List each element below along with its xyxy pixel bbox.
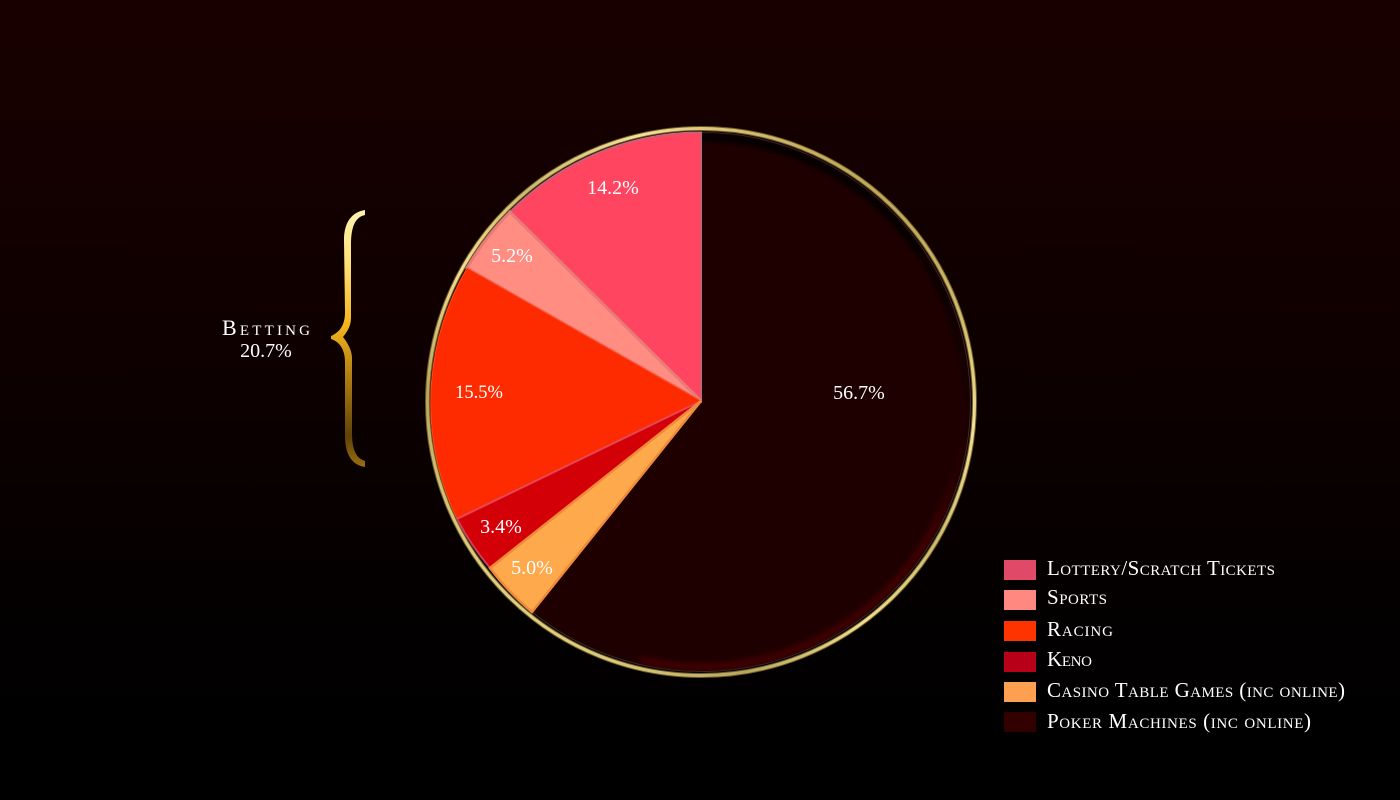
legend label: sports: Sports xyxy=(1047,585,1107,609)
legend label: keno: Keno xyxy=(1047,647,1092,671)
betting value: 20.7% xyxy=(240,340,292,362)
value label: poker machines 56.7%: 56.7% xyxy=(833,382,885,404)
legend swatch: racing xyxy=(1004,621,1036,641)
slice: casino table games xyxy=(490,401,701,612)
gold ring xyxy=(428,128,974,676)
slice: poker machines xyxy=(532,132,970,672)
legend label: racing: Racing xyxy=(1047,617,1113,641)
legend swatch: keno xyxy=(1004,652,1036,672)
value label: lottery 14.2%: 14.2% xyxy=(587,177,639,199)
legend label: lottery: Lottery/Scratch Tickets xyxy=(1047,556,1275,580)
legend xyxy=(1004,556,1345,733)
slice: racing xyxy=(431,268,701,519)
poker slice edge shading xyxy=(640,137,966,667)
legend swatch: casino table games xyxy=(1004,682,1036,702)
slice: sports xyxy=(467,212,701,401)
value label: casino 5.0%: 5.0% xyxy=(511,557,553,579)
legend swatch: lottery xyxy=(1004,560,1036,580)
legend label: casino table games: Casino Table Games (inc online) xyxy=(1047,678,1345,702)
betting label: Betting xyxy=(222,315,310,340)
pie chart xyxy=(428,128,974,676)
slice: keno xyxy=(457,401,701,568)
legend swatch: poker machines xyxy=(1004,712,1036,732)
legend label: poker machines: Poker Machines (inc online) xyxy=(1047,709,1311,733)
value label: keno 3.4%: 3.4% xyxy=(480,516,522,538)
legend swatch: sports xyxy=(1004,590,1036,610)
value label: sports 5.2%: 5.2% xyxy=(491,245,533,267)
icon: betting brace xyxy=(331,210,365,467)
slice: lottery and scratch tickets xyxy=(510,132,701,401)
value label: racing 15.5%: 15.5% xyxy=(455,383,503,403)
